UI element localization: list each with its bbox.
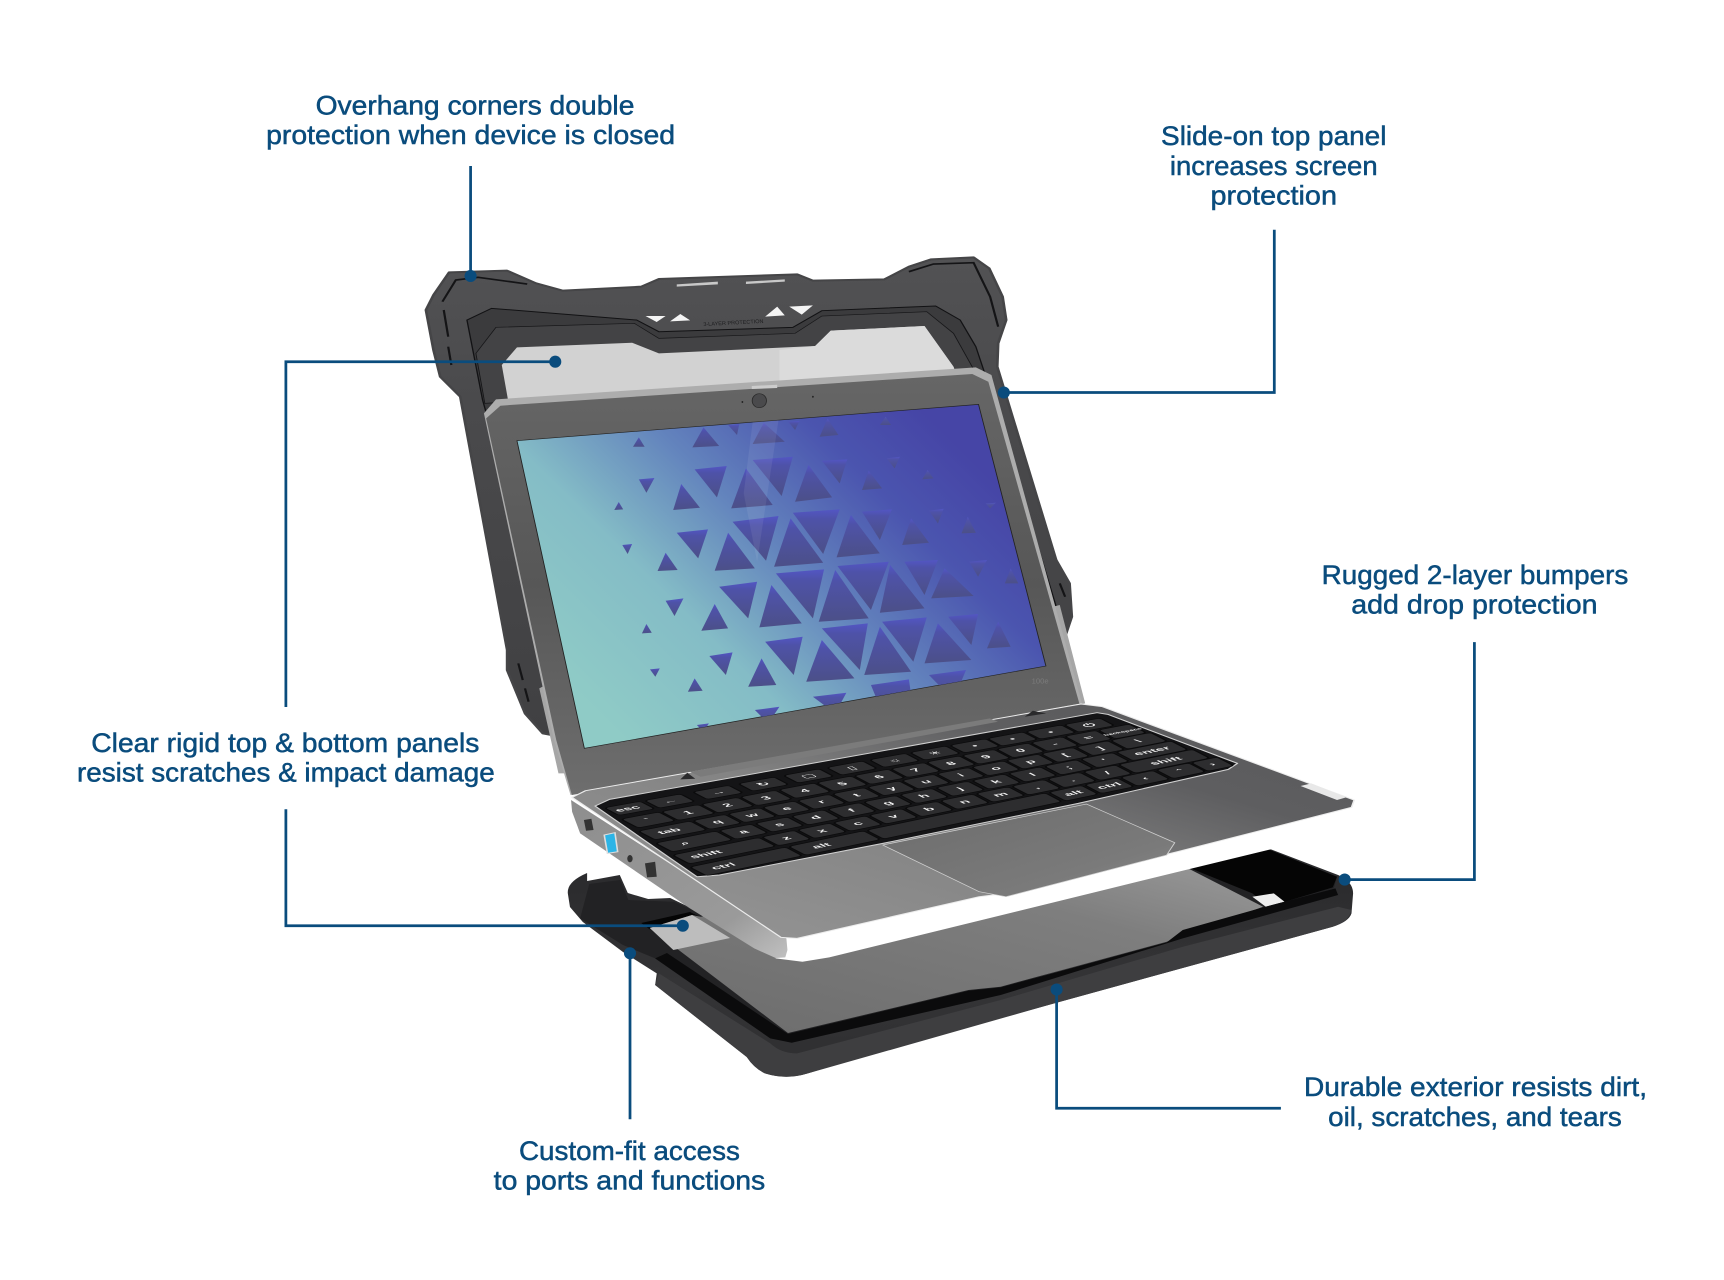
home letter row xyxy=(655,741,1188,852)
slide-on label text: protection xyxy=(1211,181,1337,211)
white arrow tabs xyxy=(646,305,813,322)
callout: custom-fit access xyxy=(494,947,765,1196)
deck surface xyxy=(572,704,1354,938)
slide-on label text: increases screen xyxy=(1170,151,1378,181)
black wedge beside panel xyxy=(655,888,1338,1043)
rugged label text: add drop protection xyxy=(1351,590,1598,620)
top case recess xyxy=(467,306,1056,740)
clear panels label text xyxy=(77,728,495,788)
keyboard keys xyxy=(604,718,1234,876)
function key row xyxy=(604,718,1115,815)
keyboard well xyxy=(595,713,1237,877)
embossed case text: 3-LAYER PROTECTION xyxy=(703,319,764,328)
cutout notch xyxy=(1252,893,1285,907)
clear bottom panel xyxy=(650,868,1263,1033)
screen triangle pattern xyxy=(614,417,1018,732)
top letter row xyxy=(638,733,1168,840)
lower case inner tray xyxy=(580,849,1337,1042)
hinge arms xyxy=(539,605,1085,773)
silver left side xyxy=(571,800,787,958)
durable label text: Durable exterior resists dirt, xyxy=(1304,1072,1647,1102)
side ports xyxy=(584,819,657,877)
custom-fit label text: Custom-fit access xyxy=(519,1136,740,1166)
top tab slots xyxy=(677,279,785,287)
lower letter row xyxy=(672,749,1210,864)
slide-on label text: Slide-on top panel xyxy=(1161,121,1386,151)
number key row xyxy=(621,723,1150,828)
top case outer shell xyxy=(426,257,1072,740)
lower protective case xyxy=(568,848,1353,1077)
clear top panel xyxy=(502,326,956,400)
tray slot xyxy=(641,912,701,929)
overhang label text xyxy=(266,90,675,150)
lid case and laptop screen xyxy=(426,257,1085,795)
laptop lid silver frame xyxy=(484,367,1082,795)
rugged label text xyxy=(1322,560,1628,620)
webcam xyxy=(741,385,814,408)
slide-on label text xyxy=(1161,121,1386,211)
callout: durable exterior xyxy=(1051,983,1647,1132)
black corner of tray xyxy=(1191,849,1337,907)
lower case outer shell xyxy=(568,848,1353,1077)
panel highlight xyxy=(650,915,730,950)
clear top panel lighter half xyxy=(779,326,956,393)
rim shading xyxy=(655,907,1351,1077)
callout: slide-on top panel xyxy=(998,121,1386,399)
durable label text: oil, scratches, and tears xyxy=(1328,1102,1622,1132)
overhang label text: Overhang corners double xyxy=(316,90,634,120)
clear panels label text: Clear rigid top & bottom panels xyxy=(91,728,479,758)
durable label text xyxy=(1304,1072,1647,1132)
space bar row xyxy=(690,757,1234,876)
laptop base and keyboard xyxy=(571,704,1357,962)
rear hinge strip xyxy=(690,718,998,777)
callout: clear rigid panels xyxy=(77,356,689,932)
recess inner ledge xyxy=(476,312,976,403)
screen background xyxy=(517,404,1046,748)
rugged label text: Rugged 2-layer bumpers xyxy=(1322,560,1628,590)
status label xyxy=(1301,783,1346,800)
corner vents xyxy=(442,263,1065,702)
trackpad xyxy=(883,804,1175,897)
callout: rugged bumpers xyxy=(1322,560,1628,886)
model badge: 100e xyxy=(1032,677,1049,685)
screen glare xyxy=(744,420,779,562)
hinge slots xyxy=(680,711,1046,779)
callout: overhang corners xyxy=(266,90,675,282)
overhang label text: protection when device is closed xyxy=(266,120,675,150)
clear panels label text: resist scratches & impact damage xyxy=(77,758,495,788)
white underside of laptop xyxy=(776,803,1357,962)
custom-fit label text xyxy=(494,1136,765,1196)
laptop bezel xyxy=(486,374,1079,795)
custom-fit label text: to ports and functions xyxy=(494,1166,765,1196)
